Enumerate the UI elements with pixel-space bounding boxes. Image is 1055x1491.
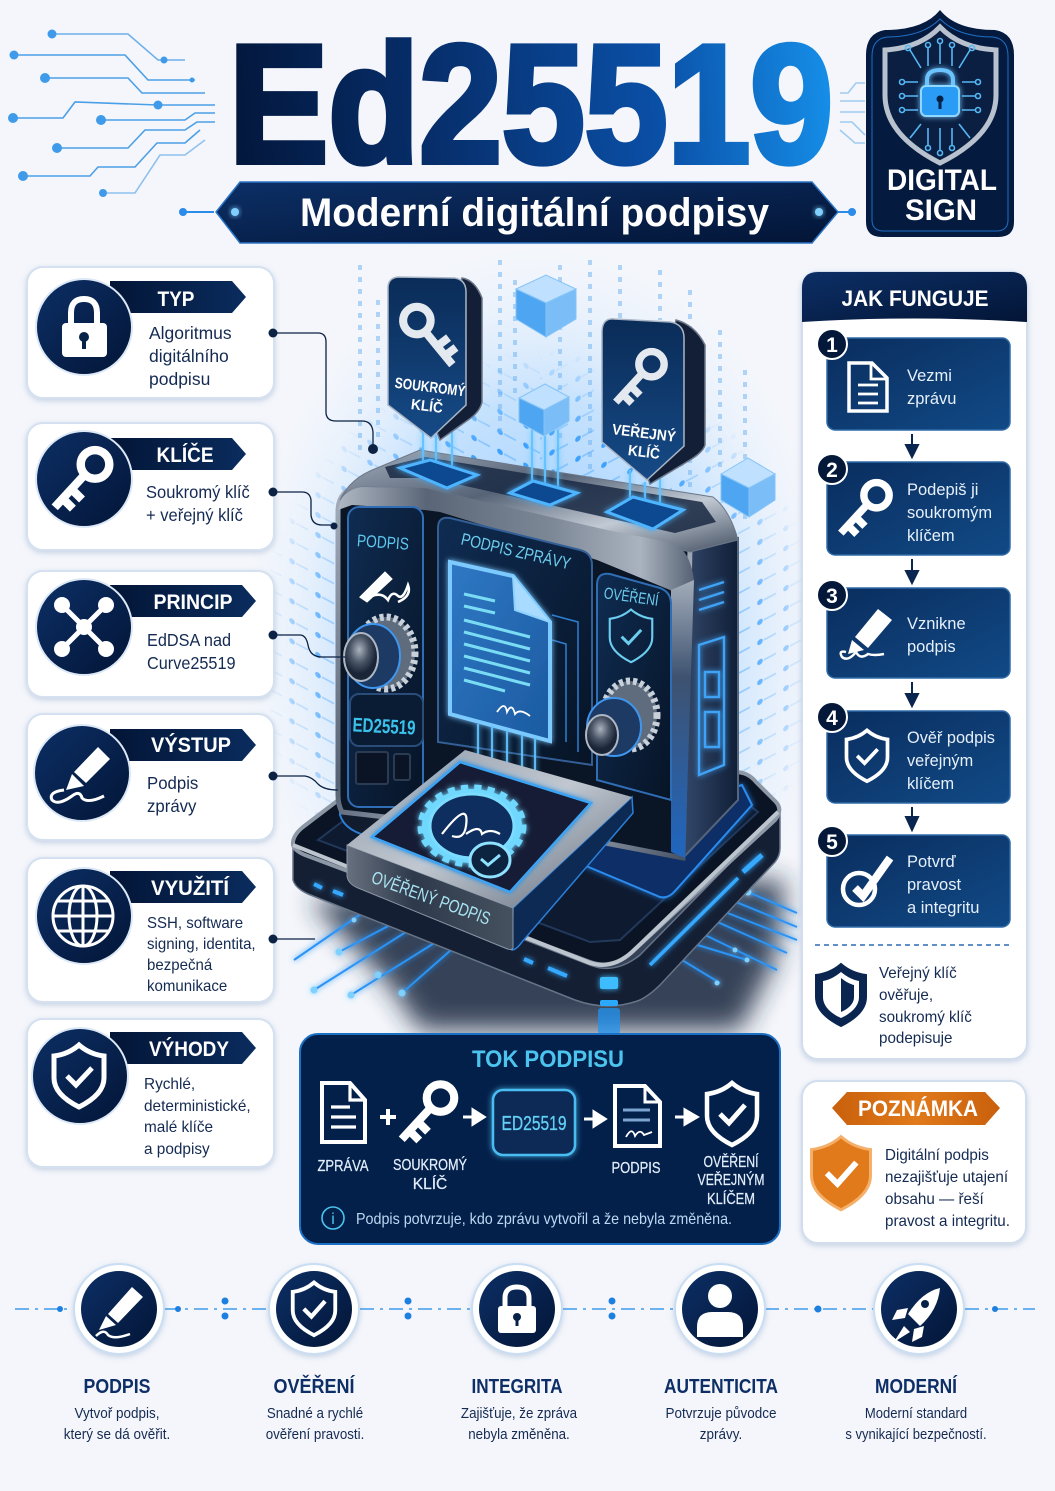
feature: autenticita: Potvrzuje původce <box>666 1405 777 1421</box>
base side <box>293 812 780 1006</box>
icon: panel shield <box>610 610 652 662</box>
text: typ: Algoritmus <box>149 323 232 343</box>
floating tag: public key: KLÍČ <box>627 441 661 463</box>
title: Ed25519 <box>229 10 833 198</box>
panel: jak funguje <box>802 272 1027 1059</box>
floating data cubes <box>516 275 775 517</box>
feature: moderní: MODERNÍ <box>875 1375 957 1398</box>
shadow under base <box>310 880 785 1030</box>
text: note: Digitální podpis <box>885 1147 989 1164</box>
body front face <box>338 487 690 858</box>
feature: ověření: Snadné a rychlé <box>267 1404 363 1421</box>
ribbon: výhody <box>110 1032 256 1064</box>
feature: podpis: který se dá ověřit. <box>64 1426 170 1442</box>
step 3: Vznikne <box>907 614 966 633</box>
text: princip: EdDSA nad <box>147 630 231 650</box>
tray label: OVĚŘENÝ PODPIS <box>369 867 493 929</box>
panel header: JAK FUNGUJE <box>842 286 988 311</box>
icon: lock <box>36 279 132 375</box>
step 4: Ověř podpis <box>907 728 995 747</box>
text: princip: Curve25519 <box>147 653 236 673</box>
panel: klíče <box>27 423 274 550</box>
icon: shield <box>32 1028 128 1124</box>
ed25519 box <box>493 1090 575 1155</box>
knob right <box>586 681 657 756</box>
flow labels: SOUKROMÝ <box>393 1157 467 1174</box>
text: výhody: Rychlé, <box>144 1076 195 1093</box>
note text: Podpis potvrzuje, kdo zprávu vytvořil a že nebyla změněna. <box>356 1211 732 1228</box>
step 4: 4 <box>826 707 838 730</box>
step 4: veřejným <box>907 751 973 770</box>
panel: výstup <box>27 714 274 840</box>
floating tag: public key <box>602 319 705 484</box>
step 5 <box>817 826 1010 927</box>
decoration: circuit lines left of title <box>8 30 865 197</box>
text: klíče: + veřejný klíč <box>146 506 243 525</box>
feature: ověření: OVĚŘENÍ <box>274 1374 355 1398</box>
feature: moderní <box>845 1264 987 1442</box>
text: výhody: malé klíče <box>144 1119 213 1136</box>
floating tag: private key: SOUKROMÝ <box>394 374 466 400</box>
icon: summary shield <box>816 964 866 1026</box>
lower body collar <box>340 785 420 842</box>
ribbon: princip <box>110 585 256 617</box>
step 1: Vezmi <box>907 366 952 385</box>
arrow 1 <box>906 434 918 457</box>
icon: orange shield <box>812 1137 870 1210</box>
ribbon: typ <box>110 281 246 313</box>
text: typ: podpisu <box>149 369 210 389</box>
feature: podpis: Vytvoř podpis, <box>75 1405 159 1421</box>
heading: výstup: VÝSTUP <box>151 733 231 757</box>
badge: digital sign: DIGITAL <box>887 164 997 197</box>
feature: ověření: ověření pravosti. <box>266 1425 364 1442</box>
icon: message <box>322 1083 365 1142</box>
flow labels: ZPRÁVA <box>318 1158 369 1175</box>
arrow <box>584 1112 605 1126</box>
panel: využití <box>27 858 274 1002</box>
step 4 <box>817 702 1010 803</box>
text: note: obsahu — řeší <box>885 1191 984 1208</box>
ribbon: poznámka: POZNÁMKA <box>858 1096 978 1121</box>
step 5: 5 <box>826 831 838 854</box>
feature: autenticita: zprávy. <box>700 1426 742 1442</box>
step 1: 1 <box>826 334 838 357</box>
feature: podpis: PODPIS <box>84 1376 150 1398</box>
icon: verification shield <box>707 1083 757 1145</box>
floating tag: private key <box>388 277 482 440</box>
panel: poznámka <box>802 1081 1026 1243</box>
step 1 <box>817 329 1010 430</box>
ribbon: poznámka <box>832 1092 1000 1125</box>
icon: key <box>36 431 132 527</box>
text: typ: digitálního <box>149 346 229 366</box>
panel: výhody <box>27 1019 274 1167</box>
feature: integrita: nebyla změněna. <box>468 1425 570 1442</box>
text: využití: signing, identita, <box>147 936 256 953</box>
subtitle banner: Moderní digitální podpisy <box>300 191 770 235</box>
icon: info: i <box>331 1211 335 1228</box>
inner frames behind document <box>552 615 578 752</box>
icon: globe <box>36 868 132 964</box>
tray screen <box>372 762 591 892</box>
text: využití: SSH, software <box>147 915 243 932</box>
ribbon: využití <box>110 871 256 903</box>
step 2 <box>817 454 1010 555</box>
text: key summary: Veřejný klíč <box>879 965 957 982</box>
badge: digital sign <box>866 10 1014 237</box>
arrow <box>675 1110 697 1124</box>
base front light <box>600 977 618 989</box>
badge: digital sign: SIGN <box>905 194 977 227</box>
feature: integrita: INTEGRITA <box>472 1376 562 1398</box>
text: note: pravost a integritu. <box>885 1213 1010 1230</box>
step 5: Potvrď <box>907 852 956 871</box>
panel: tok podpisu <box>300 1034 780 1244</box>
light beams from tags and document <box>423 425 660 788</box>
icon: private key <box>402 1084 454 1140</box>
feature: autenticita: AUTENTICITA <box>664 1376 778 1398</box>
panel label: podpis zprávy: PODPIS ZPRÁVY <box>459 530 573 573</box>
feature: moderní: Moderní standard <box>865 1405 967 1421</box>
side vents <box>699 582 724 775</box>
seal <box>422 789 522 863</box>
step 1: zprávu <box>907 389 956 408</box>
right metal corner <box>671 580 694 858</box>
flow labels: VEŘEJNÝM <box>698 1172 764 1189</box>
machine body <box>338 450 738 858</box>
icon: pen <box>34 725 130 821</box>
subtitle banner <box>179 182 856 243</box>
text: key summary: podepisuje <box>879 1030 952 1047</box>
step 5: a integritu <box>907 898 979 917</box>
icon: pen signature <box>361 573 409 602</box>
flow labels: KLÍČEM <box>707 1191 755 1208</box>
text: výstup: Podpis <box>147 773 198 793</box>
icon: info <box>322 1207 344 1229</box>
tray front face <box>347 845 513 950</box>
step 3: podpis <box>907 637 956 656</box>
step 2: Podepiš ji <box>907 480 978 499</box>
light rays right <box>677 888 797 986</box>
arrow 4 <box>906 807 918 830</box>
flow labels: OVĚŘENÍ <box>704 1154 759 1171</box>
flow labels: PODPIS <box>612 1160 660 1177</box>
text: využití: bezpečná <box>147 957 213 974</box>
central background glow and data streams <box>270 260 801 815</box>
machine base plate <box>293 772 797 1034</box>
heading: princip: PRINCIP <box>154 591 232 614</box>
step 2: 2 <box>826 459 838 482</box>
left panel <box>348 507 423 807</box>
plus <box>380 1109 396 1125</box>
panel header <box>802 272 1027 322</box>
text: využití: komunikace <box>147 978 227 995</box>
ribbon: klíče <box>110 438 246 470</box>
connector lines from cards to machine <box>268 328 378 944</box>
panel label: ověření: OVĚŘENÍ <box>603 583 660 610</box>
feature: integrita <box>461 1264 577 1442</box>
icon: network <box>36 579 132 675</box>
step 2: klíčem <box>907 526 955 545</box>
heading: klíče: KLÍČE <box>156 443 214 467</box>
label box ed25519 <box>350 694 423 746</box>
flow labels <box>318 1154 764 1208</box>
step 3 <box>817 580 1010 678</box>
knob left <box>344 617 415 689</box>
front metal band <box>338 487 694 600</box>
feature: integrita: Zajišťuje, že zpráva <box>461 1404 577 1421</box>
right panel <box>597 574 671 800</box>
tray right side <box>512 797 633 950</box>
icon: signature doc <box>615 1086 660 1146</box>
ribbon: výstup <box>110 729 256 761</box>
tray top <box>347 750 632 908</box>
step 3: 3 <box>826 585 838 608</box>
flow labels: KLÍČ <box>413 1176 447 1193</box>
text: key summary: soukromý klíč <box>879 1009 972 1026</box>
switches <box>356 752 410 784</box>
text: klíče: Soukromý klíč <box>146 483 250 502</box>
feature: ověření <box>266 1264 364 1442</box>
heading: TOK PODPISU <box>472 1046 624 1073</box>
panel: princip <box>27 571 274 697</box>
text: výhody: a podpisy <box>144 1141 210 1158</box>
output tray <box>347 750 633 950</box>
heading: typ: TYP <box>158 288 194 311</box>
panel: typ <box>27 267 274 398</box>
center panel <box>438 518 592 765</box>
light rays left <box>294 907 459 998</box>
step 4: klíčem <box>907 774 954 793</box>
feature: podpis <box>64 1264 170 1442</box>
floating tag: public key: VEŘEJNÝ <box>611 420 677 446</box>
feature: moderní: s vynikající bezpečností. <box>845 1426 987 1442</box>
text: výstup: zprávy <box>147 796 197 816</box>
slots on machine top <box>400 460 683 529</box>
ed25519 box: ED25519 <box>502 1113 566 1135</box>
panel label: podpis: PODPIS <box>356 531 410 554</box>
heading: výhody: VÝHODY <box>149 1037 229 1061</box>
heading: využití: VYUŽITÍ <box>151 876 230 900</box>
seal check <box>470 843 510 877</box>
body side face <box>683 538 738 858</box>
arrow <box>463 1110 484 1124</box>
feature: autenticita <box>664 1264 778 1442</box>
floating tag: private key: KLÍČ <box>410 395 444 417</box>
base leds <box>314 855 762 976</box>
step 5: pravost <box>907 875 961 894</box>
arrow 3 <box>906 682 918 706</box>
step 2: soukromým <box>907 503 992 522</box>
base top <box>293 772 779 964</box>
text: note: nezajišťuje utajení <box>885 1169 1009 1186</box>
machine plinth <box>560 785 752 897</box>
text: výhody: deterministické, <box>144 1098 251 1115</box>
icon: glowing document <box>450 562 550 741</box>
text: key summary: ověřuje, <box>879 987 933 1004</box>
body top face <box>340 450 738 552</box>
bottom connectors <box>15 1298 1035 1320</box>
label box ed25519: ED25519 <box>352 714 416 740</box>
arrow 2 <box>906 559 918 583</box>
